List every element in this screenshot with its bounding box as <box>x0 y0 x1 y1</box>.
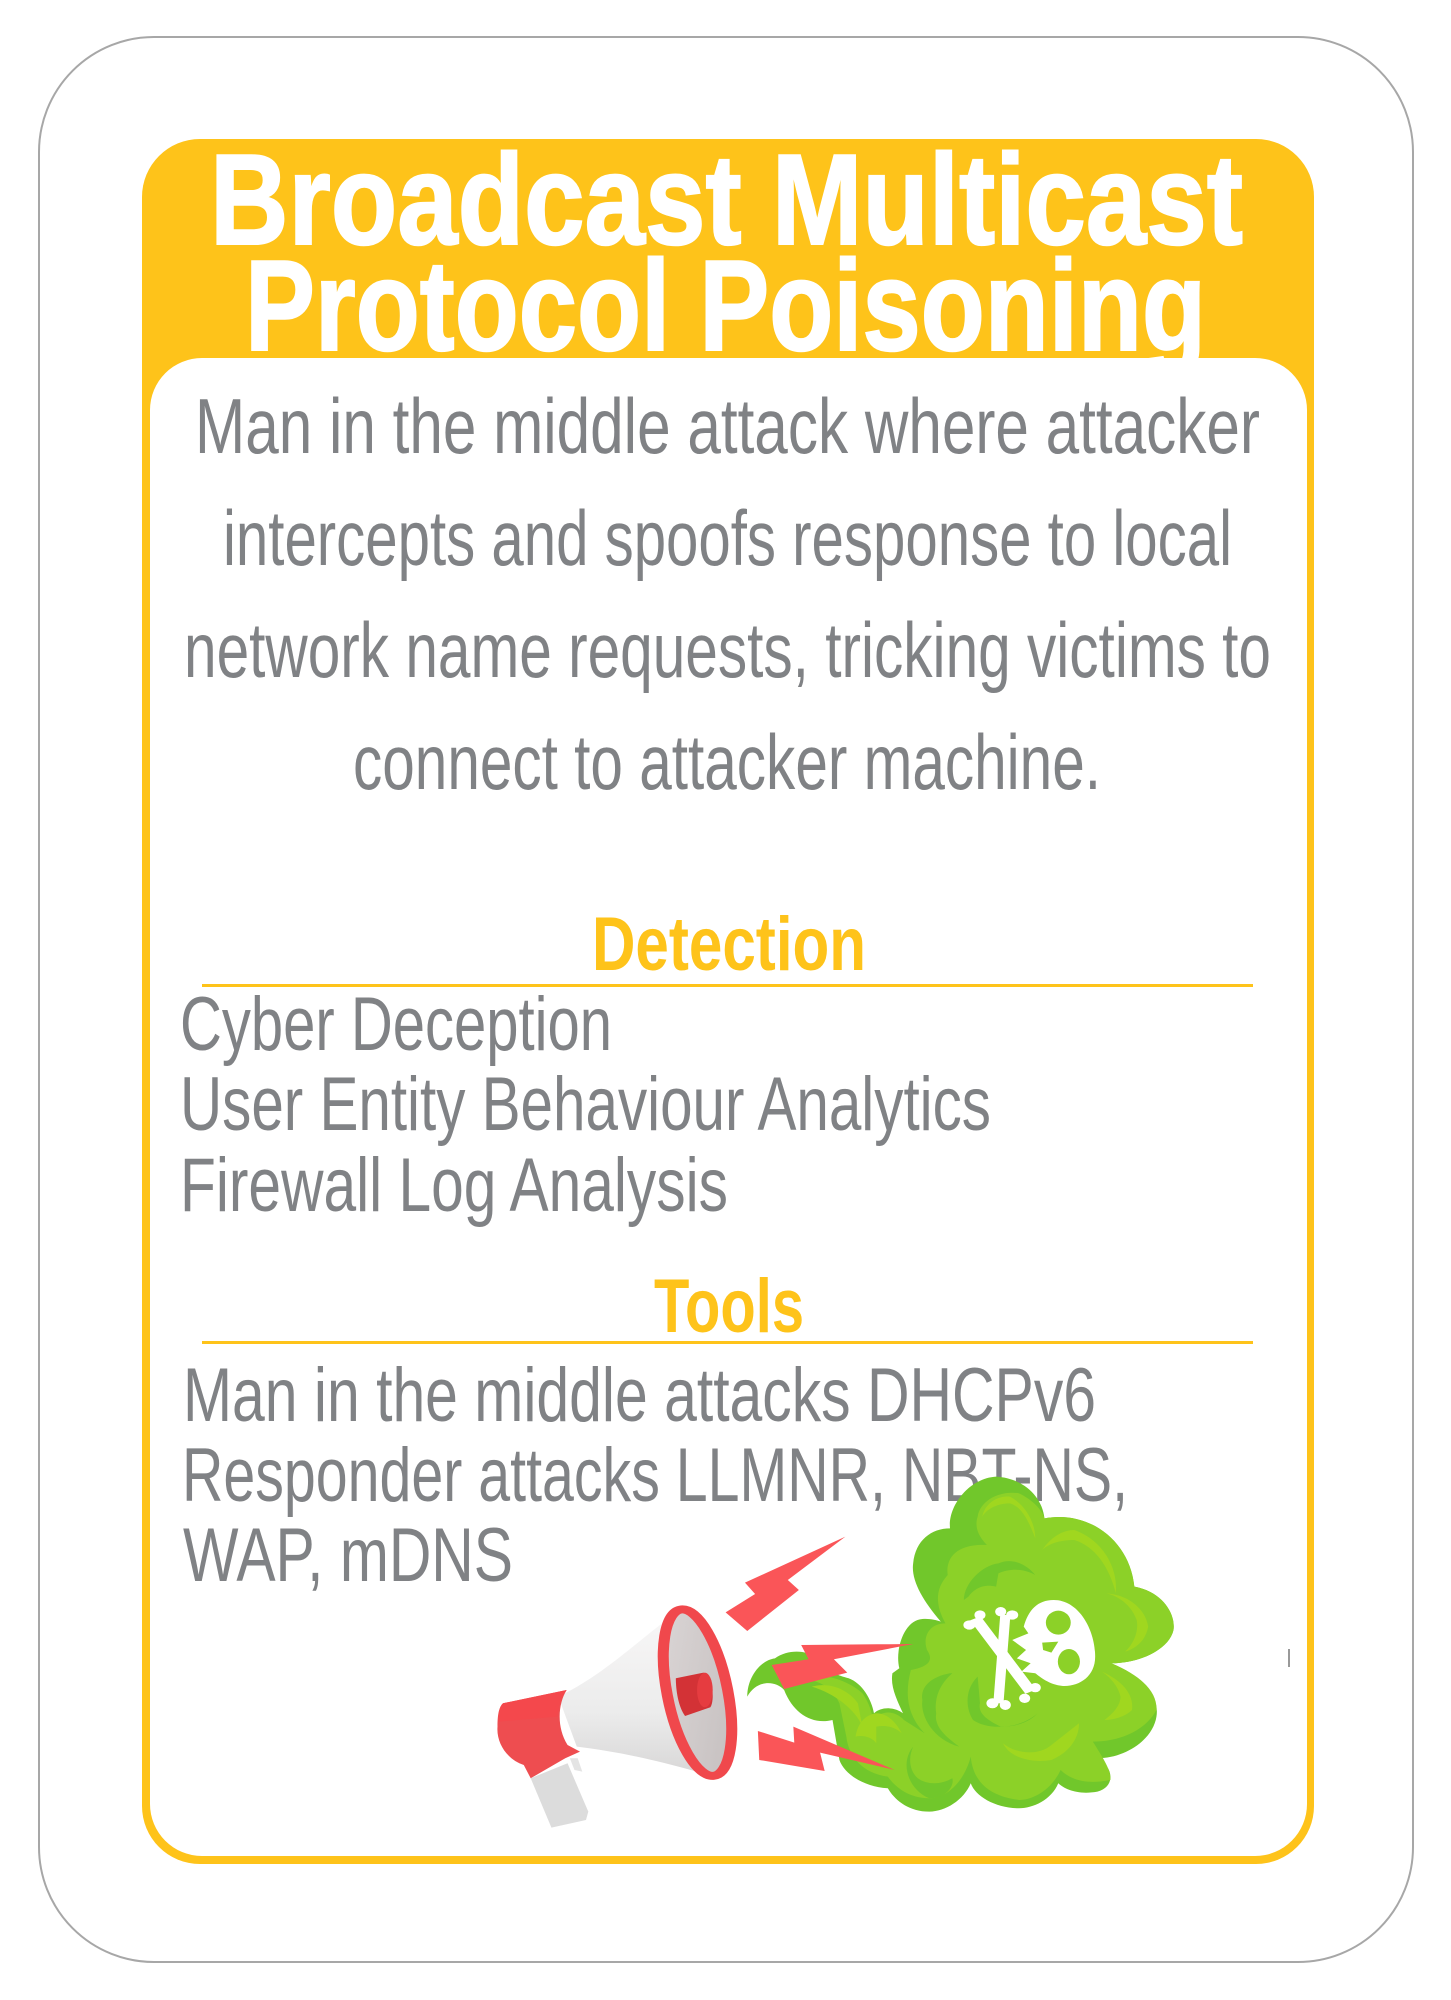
heading: tools <box>202 1264 1253 1349</box>
description text: connect to attacker machine. <box>353 718 1101 806</box>
tools list: Man in the middle attacks DHCPv6 <box>183 1353 1096 1438</box>
megaphone collar <box>497 1690 580 1778</box>
tools list: WAP, mDNS <box>183 1513 513 1598</box>
megaphone cone <box>558 1622 697 1772</box>
panel: white content area <box>150 358 1307 1856</box>
title <box>210 128 1243 378</box>
detection list: Cyber Deception <box>180 982 612 1067</box>
detection list <box>180 982 991 1228</box>
title: Protocol Poisoning <box>245 234 1206 378</box>
description text <box>184 382 1271 806</box>
heading: detection <box>202 902 1253 987</box>
title: Broadcast Multicast <box>210 128 1243 272</box>
detection list: User Entity Behaviour Analytics <box>180 1062 991 1147</box>
tools list <box>182 1353 1128 1598</box>
megaphone driver <box>676 1673 713 1716</box>
icon: megaphone with lightning bolts <box>497 1537 913 1828</box>
detection list: Firewall Log Analysis <box>180 1143 728 1228</box>
skull and crossbones <box>963 1600 1095 1710</box>
megaphone handle <box>531 1763 588 1828</box>
panel: yellow frame <box>142 139 1314 1864</box>
tools list: Responder attacks LLMNR, NBT-NS, <box>182 1433 1128 1518</box>
cloud shading <box>907 1561 1038 1798</box>
icon: poison cloud with skull <box>747 1477 1174 1812</box>
small tick mark <box>1288 1649 1290 1667</box>
cloud highlights <box>812 1496 1148 1761</box>
megaphone trigger <box>570 1758 582 1772</box>
heading: detection: Detection <box>592 902 866 987</box>
heading: tools: Tools <box>654 1264 804 1349</box>
lightning bolts <box>726 1537 913 1771</box>
megaphone bell rim <box>651 1606 744 1779</box>
